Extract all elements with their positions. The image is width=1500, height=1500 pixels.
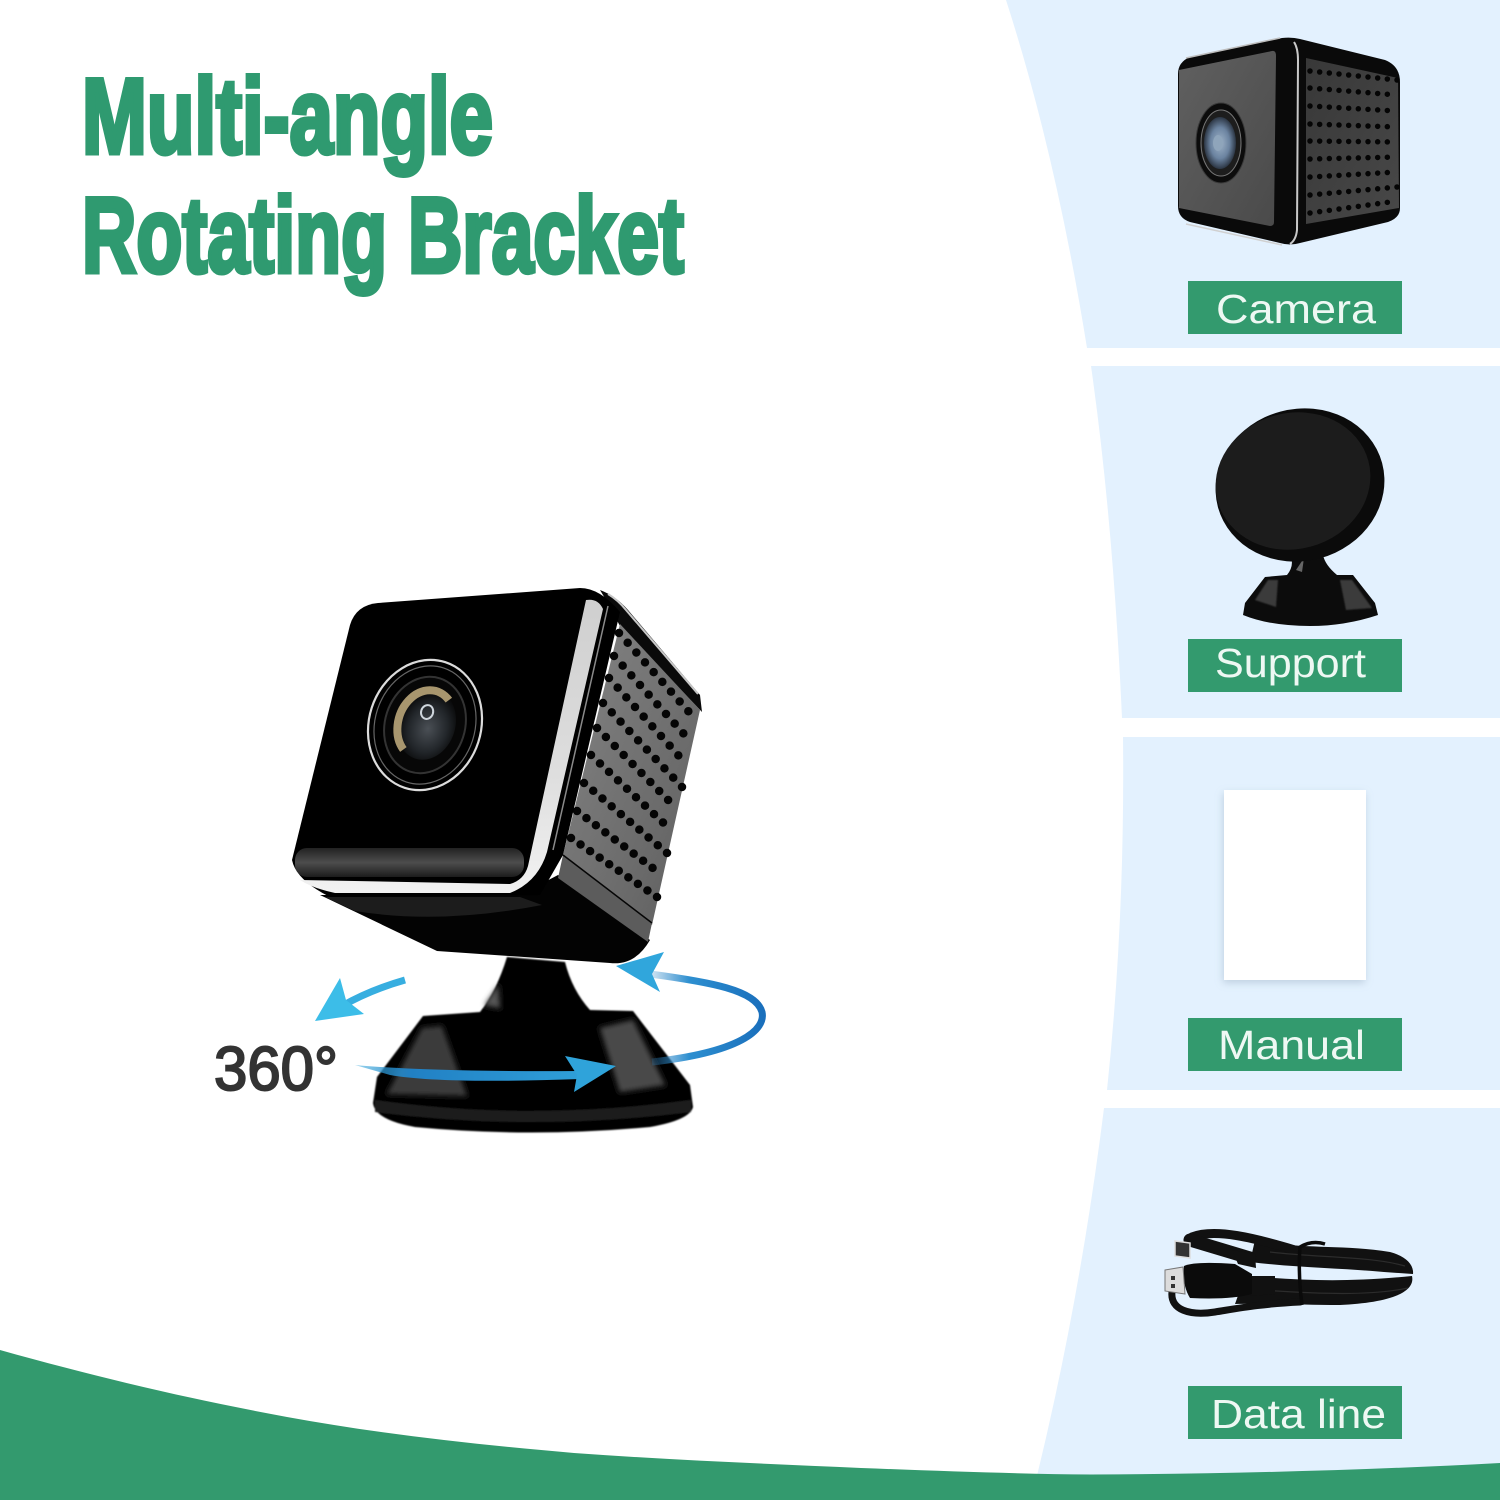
bracket base: [373, 957, 693, 1132]
camera top edge highlight: [600, 590, 702, 712]
panel: data line background: [1036, 1108, 1500, 1480]
thumbnail grille dots: [1310, 71, 1397, 213]
strand separation lines: [1260, 1252, 1408, 1294]
strain relief ribs: [1232, 1250, 1275, 1296]
360 rotation arrow: bottom: [355, 1056, 616, 1092]
rotation label: 360°: [214, 1035, 338, 1104]
label: Camera: Camera: [1216, 286, 1376, 332]
green bottom wave: [0, 1350, 1500, 1500]
label: Support: [1188, 639, 1402, 692]
cable strands: [1172, 1234, 1300, 1313]
label: Support: Support: [1215, 640, 1367, 686]
title: Multi-angle: [82, 56, 493, 176]
title: [82, 56, 684, 295]
side face lower band: [558, 855, 652, 942]
lens: [351, 645, 499, 805]
accessory: magnetic support: [1198, 390, 1402, 626]
camera bottom face: [320, 875, 650, 963]
support disc rim: [1198, 390, 1402, 580]
360 rotation arrow: upper left: [315, 978, 405, 1021]
camera top edge sheen: [608, 594, 698, 694]
title: Rotating Bracket: [82, 175, 684, 295]
panel: camera background: [1006, 0, 1500, 348]
front lower gloss band: [295, 848, 524, 877]
camera front face: [292, 588, 620, 897]
thumbnail lens: [1196, 103, 1246, 183]
glossy edge around corner: [300, 600, 603, 893]
panel: support background: [1091, 366, 1500, 718]
support base: [1243, 555, 1378, 626]
main camera on bracket: [292, 588, 762, 1132]
label: Data line: [1188, 1386, 1402, 1439]
camera side face: [563, 624, 700, 925]
label: Data line: Data line: [1211, 1391, 1386, 1437]
cable tie: [1299, 1243, 1325, 1305]
accessory: manual sheet: [1224, 790, 1366, 980]
panel: manual background: [1107, 737, 1500, 1090]
cable bundle fills: [1235, 1240, 1413, 1305]
accessory: camera thumbnail: [1178, 38, 1400, 245]
label: Camera: [1188, 281, 1402, 334]
side lower band line: [563, 855, 652, 923]
label: Manual: Manual: [1218, 1022, 1365, 1068]
label: Manual: [1188, 1018, 1402, 1071]
support disc face: [1200, 395, 1386, 567]
accessory: data cable: [1165, 1234, 1413, 1313]
360 rotation arrow: right loop: [616, 952, 762, 1062]
HDMI plug: [1184, 1263, 1252, 1298]
thin edge line: [553, 606, 608, 850]
side face dots: [571, 633, 697, 897]
mini connector: [1175, 1241, 1190, 1258]
